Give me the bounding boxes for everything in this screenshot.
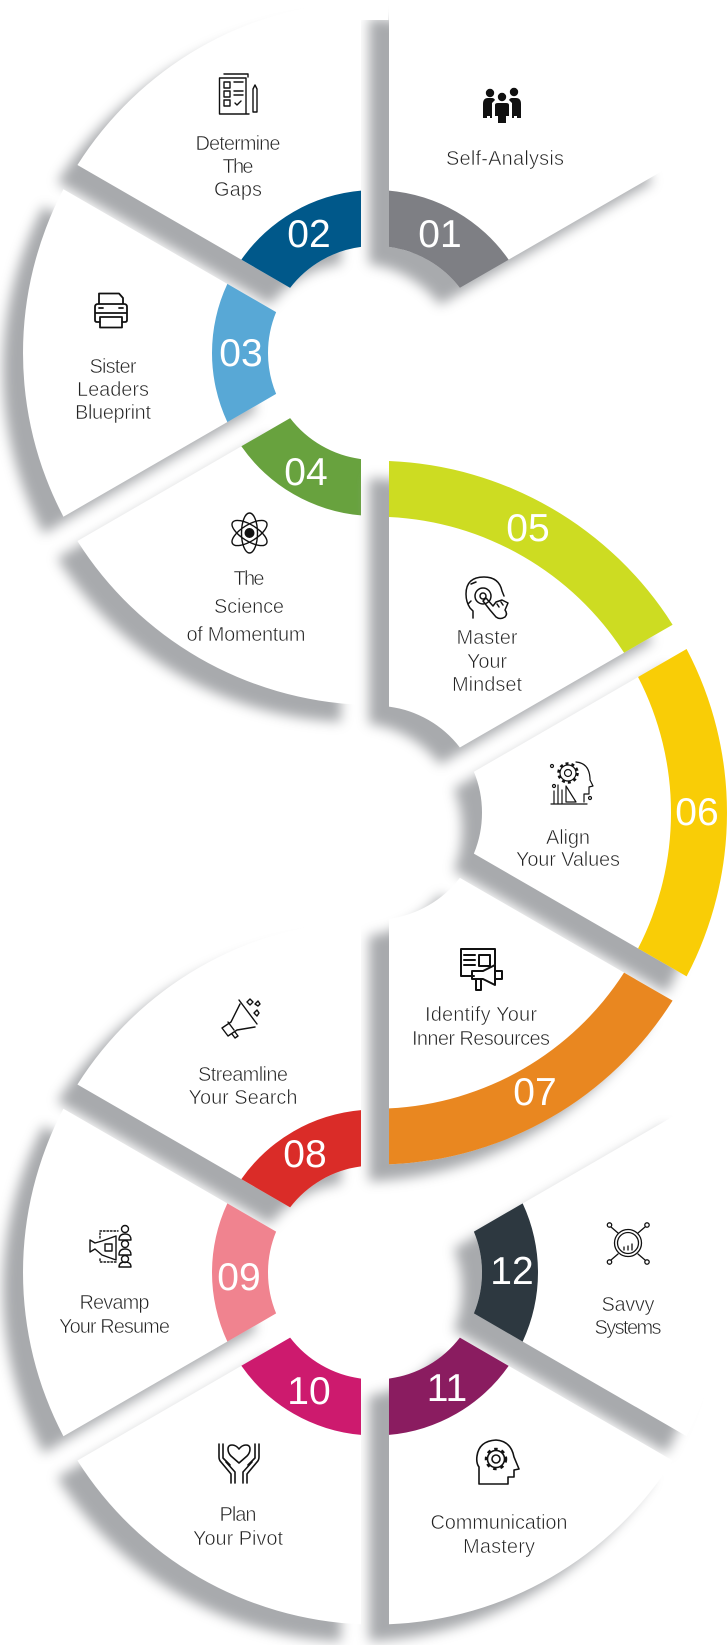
panel 06 sector — [438, 649, 727, 1038]
label Savvy Systems: Systems — [594, 1317, 662, 1339]
panel 04 sector — [77, 418, 361, 705]
label Determine The Gaps — [196, 133, 280, 201]
label Revamp Your Resume — [59, 1292, 170, 1338]
label Sister Leaders Blueprint: Leaders — [77, 379, 149, 401]
label The Science of Momentum: of Momentum — [186, 624, 306, 646]
number 08: 08 — [283, 1133, 327, 1176]
panel: step 11 Communication Mastery — [283, 1317, 673, 1645]
icon: megaphone with stars — [222, 999, 260, 1038]
ring segment 08 — [241, 1076, 385, 1228]
icon: mind touch — [466, 577, 508, 618]
ring segment 06 — [521, 649, 727, 990]
label Communication Mastery: Mastery — [463, 1536, 535, 1558]
label Identify Your Inner Resources: Inner Resources — [412, 1028, 550, 1050]
label Savvy Systems: Savvy — [602, 1294, 654, 1316]
icon: head with gear — [550, 762, 593, 804]
label The Science of Momentum — [186, 568, 306, 646]
label Determine The Gaps: Gaps — [214, 179, 262, 201]
label Determine The Gaps: The — [222, 156, 254, 178]
panel 10 sector — [77, 1338, 361, 1624]
label Determine The Gaps: Determine — [196, 133, 280, 155]
panel 09 sector — [0, 1047, 312, 1436]
panel: step 04 The Science of Momentum — [77, 418, 361, 705]
panel 02 sector — [77, 0, 467, 308]
icon: billboard megaphone — [461, 949, 502, 990]
label Streamline Your Search: Your Search — [188, 1087, 298, 1109]
label Sister Leaders Blueprint: Sister — [90, 356, 137, 378]
icon: people — [483, 88, 521, 123]
label Plan Your Pivot — [193, 1504, 283, 1550]
label The Science of Momentum: Science — [214, 596, 284, 618]
icon: dollar target — [607, 1223, 649, 1264]
label Identify Your Inner Resources — [412, 1004, 550, 1050]
label Streamline Your Search: Streamline — [198, 1064, 288, 1086]
ring segment 12 — [438, 1203, 582, 1356]
panel 03 sector — [0, 128, 312, 517]
label Master Your Mindset: Your — [467, 651, 507, 673]
label Communication Mastery: Communication — [430, 1512, 568, 1534]
number 11: 11 — [427, 1367, 467, 1410]
label Master Your Mindset — [452, 627, 522, 696]
icon: checklist — [220, 74, 257, 114]
label Align Your Values — [516, 827, 620, 871]
label Communication Mastery — [430, 1512, 568, 1558]
number 06: 06 — [675, 791, 719, 834]
ring segment 02 — [241, 156, 385, 308]
ring segment 09 — [168, 1189, 312, 1342]
panel 12 sector — [438, 1109, 727, 1498]
ring segment 07 — [365, 905, 673, 1246]
label Self-Analysis: Self-Analysis — [446, 148, 564, 170]
number 02: 02 — [287, 213, 331, 256]
label Plan Your Pivot: Your Pivot — [193, 1528, 283, 1550]
icon: printer — [95, 294, 127, 328]
ring segment 11 — [365, 1317, 509, 1469]
number 09: 09 — [217, 1256, 261, 1299]
number 04: 04 — [284, 451, 328, 494]
label Revamp Your Resume: Revamp — [80, 1292, 150, 1314]
label Streamline Your Search — [188, 1064, 298, 1109]
panel: step 06 Align Your Values — [438, 649, 727, 1038]
panel 11 sector — [283, 1317, 673, 1645]
ring segment 10 — [241, 1338, 361, 1435]
ring segment 04 — [241, 418, 361, 515]
ring segment 05 — [389, 461, 673, 653]
panel: step 08 Streamline Your Search — [77, 839, 467, 1228]
panel 01 sector — [389, 1, 673, 288]
panel: step 12 Savvy Systems — [438, 1109, 727, 1498]
label Sister Leaders Blueprint: Blueprint — [75, 402, 151, 424]
number 05: 05 — [506, 507, 550, 550]
label Master Your Mindset: Master — [456, 627, 518, 649]
label Align Your Values: Align — [546, 827, 590, 849]
panel: step 01 Self-Analysis — [358, 0, 673, 288]
number 12: 12 — [490, 1250, 534, 1293]
panel: step 03 Sister Leaders Blueprint — [0, 128, 312, 517]
ring segment 03 — [168, 270, 312, 422]
icon: hands with heart — [219, 1444, 259, 1483]
icon: atom — [228, 513, 271, 553]
number 03: 03 — [219, 332, 263, 375]
icon: head with gear — [477, 1440, 519, 1484]
panel 08 sector — [77, 839, 467, 1228]
label Identify Your Inner Resources: Identify Your — [425, 1004, 537, 1026]
panel 07 sector — [283, 857, 673, 1246]
icon: video people — [90, 1226, 131, 1267]
label Revamp Your Resume: Your Resume — [59, 1316, 170, 1338]
panel: step 07 Identify Your Inner Resources — [283, 857, 673, 1246]
label Sister Leaders Blueprint — [75, 356, 151, 424]
ring segment 01 — [389, 191, 509, 288]
panel: step 09 Revamp Your Resume — [0, 1047, 312, 1436]
panel: step 10 Plan Your Pivot — [77, 1338, 361, 1624]
label Align Your Values: Your Values — [516, 849, 620, 871]
panel: step 02 Determine The Gaps — [77, 0, 467, 308]
panel 05 sector — [389, 461, 673, 748]
label The Science of Momentum: The — [234, 568, 264, 590]
label Master Your Mindset: Mindset — [452, 674, 522, 696]
number 10: 10 — [287, 1370, 331, 1413]
label Savvy Systems — [594, 1294, 662, 1339]
label Plan Your Pivot: Plan — [220, 1504, 256, 1526]
panel: step 05 Master Your Mindset — [389, 461, 673, 748]
number 07: 07 — [513, 1071, 557, 1114]
number 01: 01 — [418, 213, 462, 256]
